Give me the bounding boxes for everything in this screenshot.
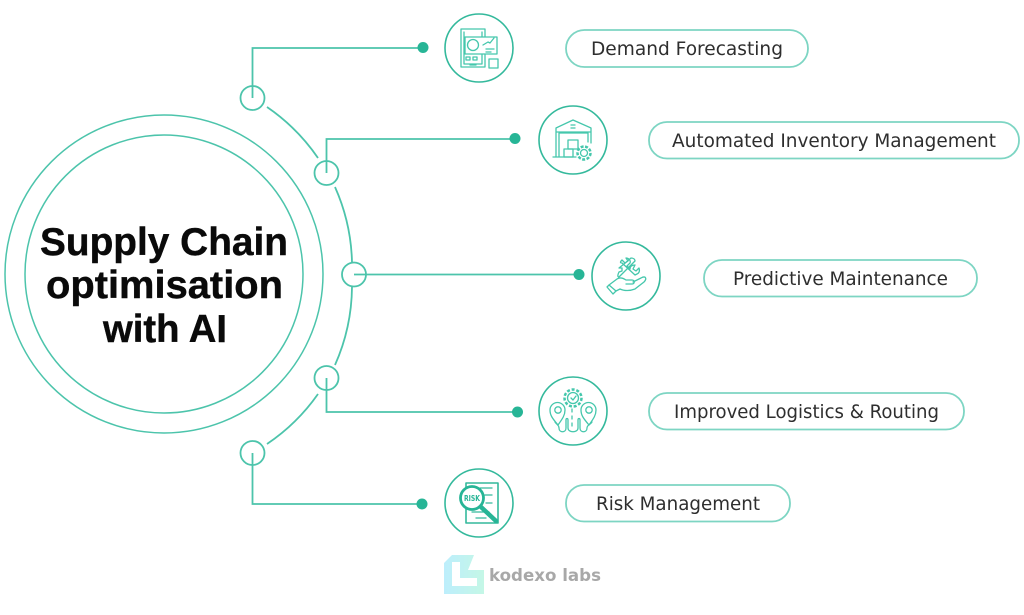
logo mark	[444, 555, 484, 594]
pill: risk management	[566, 485, 790, 522]
outer arc segments	[267, 107, 352, 444]
connector: risk	[240, 441, 428, 510]
pill: predictive maintenance: Predictive Maintenance	[733, 268, 948, 290]
pill: demand forecasting	[566, 30, 808, 67]
connector: maintenance	[342, 262, 584, 286]
connector: demand forecasting	[240, 42, 428, 110]
pill: demand forecasting: Demand Forecasting	[591, 38, 783, 60]
pill: improved logistics and routing	[649, 393, 964, 430]
title	[40, 221, 288, 351]
icon: predictive maintenance	[592, 242, 660, 310]
icon: risk management	[445, 469, 513, 537]
title: optimisation	[46, 264, 283, 307]
title: with AI	[102, 308, 227, 351]
icon: warehouse automation	[539, 106, 607, 174]
pill: improved logistics and routing: Improved Logistics & Routing	[674, 401, 939, 423]
pill: predictive maintenance	[704, 260, 977, 296]
icon: risk management: RISK	[464, 494, 481, 503]
connector: inventory	[314, 133, 520, 185]
logo: kodexo labs: kodexo labs	[489, 566, 601, 586]
pill: automated inventory management	[649, 122, 1019, 158]
central circle with title	[5, 115, 323, 433]
icon: demand forecasting	[445, 14, 513, 82]
title: Supply Chain	[40, 221, 288, 264]
pill: automated inventory management: Automated Inventory Management	[672, 130, 996, 152]
connector: logistics	[314, 366, 523, 418]
pill: risk management: Risk Management	[596, 493, 760, 515]
logo: kodexo labs	[444, 555, 601, 594]
icon: logistics and routing	[539, 377, 607, 445]
